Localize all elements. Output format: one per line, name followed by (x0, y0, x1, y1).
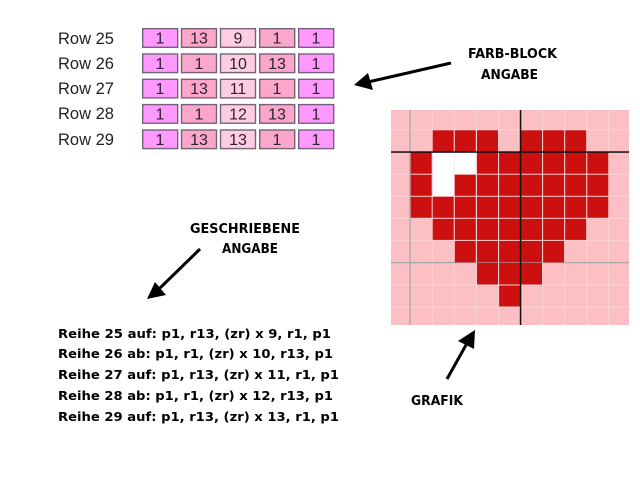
written pattern text: Reihe 25 auf: p1, r13, (zr) x 9, r1, p1 (58, 326, 331, 341)
row 27: Row 27 (58, 80, 114, 98)
heart graphic (391, 110, 629, 325)
row 28: 12 (229, 106, 247, 124)
row 28: Row 28 (58, 105, 114, 123)
row 28: 1 (312, 106, 321, 124)
row 25: 13 (190, 30, 208, 48)
label: Geschriebene Angabe: GESCHRIEBENE (190, 222, 300, 237)
row 29: 13 (229, 132, 247, 149)
label: Farb-Block Angabe (468, 47, 558, 83)
row 25: 9 (234, 30, 243, 48)
label: Geschriebene Angabe (190, 222, 300, 257)
panel: colour block chart (58, 29, 334, 149)
row 26: 10 (229, 56, 247, 73)
row 27: 1 (273, 81, 282, 98)
label: Farb-Block Angabe: ANGABE (481, 68, 538, 83)
arrow: to written pattern (147, 249, 200, 299)
row 29: 1 (156, 132, 165, 149)
row 26 (58, 54, 334, 73)
written pattern text: Reihe 26 ab: p1, r1, (zr) x 10, r13, p1 (58, 346, 333, 361)
row 26: Row 26 (58, 55, 114, 73)
row 25: 1 (273, 30, 282, 48)
label: Geschriebene Angabe: ANGABE (222, 242, 278, 257)
written pattern text: Reihe 27 auf: p1, r13, (zr) x 11, r1, p1 (58, 367, 339, 382)
row 29: Row 29 (58, 131, 114, 149)
row 28: 13 (268, 106, 286, 124)
row 28 (58, 105, 334, 124)
written pattern text: Reihe 28 ab: p1, r1, (zr) x 12, r13, p1 (58, 388, 333, 403)
label: Grafik: GRAFIK (411, 394, 464, 409)
row 29: 13 (190, 132, 208, 149)
row 25 (58, 29, 334, 48)
row 27: 1 (312, 81, 321, 98)
row 27 (58, 79, 334, 98)
arrow: to colour block chart (354, 63, 451, 90)
row 29 (58, 130, 334, 149)
row 27: 11 (230, 81, 246, 98)
written pattern text (58, 326, 339, 424)
row 27: 13 (190, 81, 208, 98)
row 26: 1 (156, 56, 165, 73)
label: Farb-Block Angabe: FARB-BLOCK (468, 47, 558, 62)
row 25: 1 (312, 30, 321, 48)
row 28: 1 (195, 106, 204, 124)
row 26: 1 (312, 56, 321, 73)
arrow: to heart graphic (447, 330, 475, 379)
row 26: 13 (268, 56, 286, 73)
row 26: 1 (195, 56, 204, 73)
row 28: 1 (156, 106, 165, 124)
row 29: 1 (312, 132, 321, 149)
row 29: 1 (273, 132, 282, 149)
written pattern text: Reihe 29 auf: p1, r13, (zr) x 13, r1, p1 (58, 409, 339, 424)
row 25: Row 25 (58, 30, 114, 48)
row 27: 1 (156, 81, 165, 98)
row 25: 1 (156, 30, 165, 48)
